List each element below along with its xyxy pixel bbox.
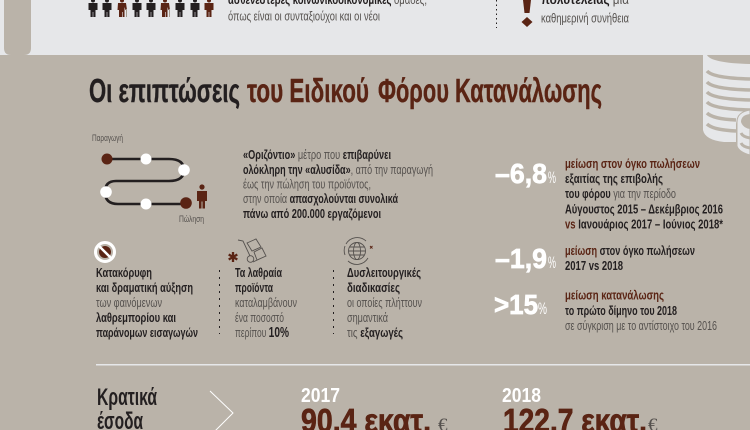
top text: luxury [541, 0, 629, 26]
stat: -1,9% [495, 243, 695, 274]
column: smuggling increase [96, 242, 198, 340]
icon: person [197, 184, 207, 208]
column: smuggling increase: λαθρεμπορίου και [96, 311, 176, 325]
column: smuggling increase: Κατακόρυφη [96, 266, 152, 280]
column: smuggling increase: των φαινόμενων [96, 296, 162, 310]
icon: hand truck [238, 239, 266, 262]
chain diagram: production to sale [92, 133, 207, 224]
stat: -6,8%: % [548, 168, 556, 187]
column: contraband products: προϊόντα [235, 281, 273, 295]
people pictogram row [88, 0, 214, 17]
icon: coin stacks [703, 55, 750, 155]
column: malfunctioning procedures: τις εξαγωγές [347, 326, 403, 340]
text block: horizontal measure: πάνω από 200.000 εργαζόμενοι [243, 207, 381, 221]
column: malfunctioning procedures: οι οποίες πλήττουν [347, 296, 422, 310]
stat: -6,8%: εξαιτίας της επιβολής [565, 171, 663, 186]
stat: >15%: >15 [494, 289, 538, 320]
text block: horizontal measure: «Οριζόντιο» μέτρο που επιβαρύνει [243, 148, 391, 162]
stat: >15%: % [538, 299, 547, 318]
revenue 2017 [301, 385, 448, 430]
icon: asterisk [229, 252, 237, 262]
stat: >15%: μείωση κατανάλωσης [565, 288, 664, 302]
dotted divider [496, 0, 498, 28]
text block: horizontal measure: έως την πώληση του προϊόντος, [243, 178, 371, 192]
column: smuggling increase: παράνομων εισαγωγών [96, 326, 198, 340]
column: contraband products [229, 239, 297, 341]
icon: exclamation mark [522, 0, 532, 27]
top text: vulnerable groups: όπως είναι οι συνταξιούχοι και οι νέοι [228, 8, 380, 24]
text block: horizontal measure: ολόκληρη την «αλυσίδα», από την παραγωγή [243, 163, 433, 177]
revenue 2017: 2017 [301, 385, 340, 407]
title: Φόρου Κατανάλωσης [378, 72, 602, 109]
column: malfunctioning procedures [344, 238, 422, 340]
top text: luxury: καθημερινή συνήθεια [541, 10, 629, 26]
stat: -1,9%: –1,9 [495, 243, 547, 274]
stat: >15% [494, 288, 717, 333]
chain diagram: production to sale: Πώληση [179, 214, 204, 224]
icon: prohibited cigarettes [96, 242, 114, 262]
text block: horizontal measure: στην οποία απασχολούνται συνολικά [243, 192, 398, 206]
icon: chevron arrow [210, 391, 233, 430]
title: Οι επιπτώσεις [89, 72, 240, 109]
column: contraband products: περίπου 10% [235, 324, 289, 341]
stat: >15%: το πρώτο δίμηνο του 2018 [565, 303, 677, 318]
icon: globe [344, 238, 372, 264]
stat: -6,8% [495, 156, 724, 232]
top panel background [0, 0, 750, 55]
column: malfunctioning procedures: Δυσλειτουργικές [347, 266, 421, 280]
stat: -6,8%: του φόρου για την περίοδο [565, 186, 676, 201]
column: malfunctioning procedures: διαδικασίες [347, 281, 400, 295]
divider [218, 270, 220, 334]
title: του Ειδικού [247, 72, 369, 109]
stat: -6,8%: –6,8 [495, 158, 547, 189]
column: contraband products: ένα ποσοστό [235, 311, 284, 325]
stat: -6,8%: μείωση στον όγκο πωλήσεων [565, 156, 700, 171]
text block: horizontal measure [243, 148, 433, 221]
column: malfunctioning procedures: σημαντικά [347, 311, 388, 325]
column: contraband products: καταλαμβάνουν [235, 296, 297, 310]
stat: -1,9%: % [548, 253, 556, 272]
revenue 2018: 2018 [502, 385, 541, 407]
divider line [96, 364, 750, 366]
heading: state revenue [97, 384, 157, 430]
stat: -1,9%: 2017 vs 2018 [565, 258, 623, 273]
top text: vulnerable groups [228, 0, 427, 24]
column: contraband products: Τα λαθραία [235, 266, 282, 280]
left tab [4, 0, 31, 55]
chain diagram: production to sale: Παραγωγή [92, 133, 123, 143]
heading: state revenue: Κρατικά [97, 384, 157, 411]
stat: -1,9%: μείωση στον όγκο πωλήσεων [565, 243, 695, 258]
column: smuggling increase: και δραματική αύξηση [96, 281, 193, 295]
divider [332, 270, 334, 334]
revenue 2018 [502, 385, 658, 430]
title [89, 72, 602, 109]
